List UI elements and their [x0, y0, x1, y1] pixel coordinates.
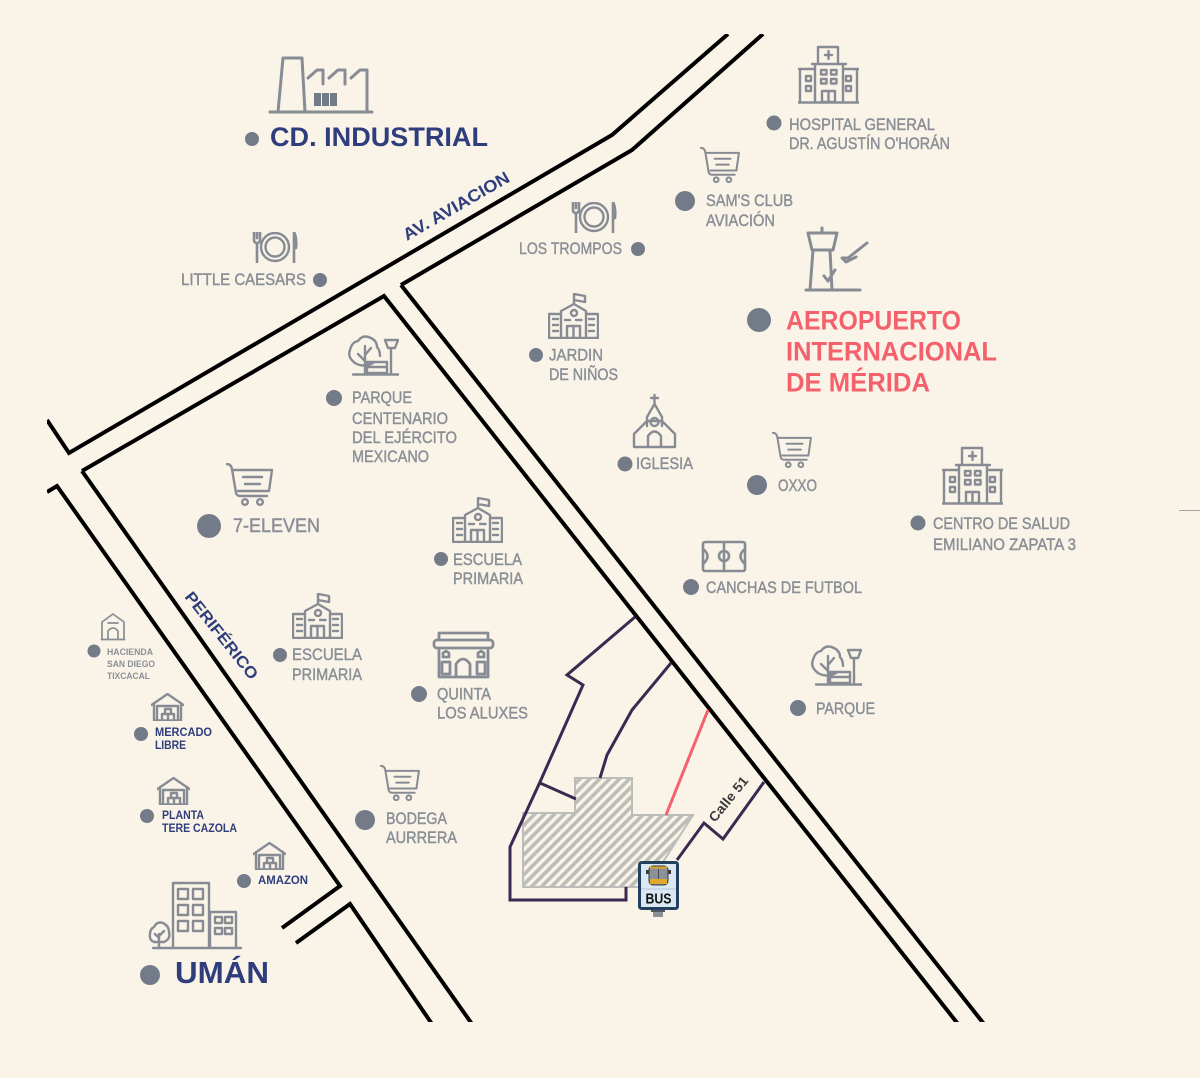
- location: Little Caesars: [181, 232, 327, 289]
- label: TERE CAZOLA: [162, 821, 237, 835]
- dot: [140, 965, 160, 985]
- icon: park: [812, 647, 862, 684]
- dot: [631, 242, 645, 256]
- location: Centro de Salud: [910, 448, 1076, 554]
- label: MERCADO: [155, 725, 212, 739]
- icon: cart: [227, 464, 272, 505]
- heading: CD. INDUSTRIAL: [270, 122, 488, 152]
- location: Umán: [140, 883, 269, 990]
- dot: [88, 644, 100, 658]
- dot: [529, 348, 543, 362]
- parcel spur: [540, 783, 576, 799]
- label: BODEGA: [386, 809, 448, 828]
- location: Escuela Primaria (north): [434, 498, 524, 588]
- label: DR. AGUSTÍN O'HORÁN: [789, 134, 950, 153]
- parcel inner curve: [600, 663, 671, 778]
- location: Amazon: [237, 843, 308, 888]
- location: Bodega Aurrera: [355, 766, 458, 847]
- icon: cart: [773, 433, 811, 467]
- icon: school: [453, 498, 502, 542]
- label: PARQUE: [816, 699, 875, 718]
- dot: [245, 132, 259, 146]
- icon: plate: [254, 232, 296, 263]
- label: PARQUE: [352, 388, 412, 407]
- icon: hospital: [798, 47, 859, 102]
- location: Cd. Industrial: [245, 58, 488, 152]
- icon: plate: [573, 202, 615, 233]
- location: Aeropuerto: [747, 228, 997, 398]
- label: LITTLE CAESARS: [181, 270, 306, 289]
- icon: control tower and plane: [806, 228, 867, 290]
- icon: cart: [381, 766, 419, 800]
- location: Planta Tere Cazola: [140, 778, 237, 835]
- dot: [747, 308, 771, 332]
- dot: [747, 475, 767, 495]
- heading: AEROPUERTO: [786, 306, 961, 336]
- label: TIXCACAL: [107, 671, 150, 682]
- label: LIBRE: [155, 738, 186, 752]
- dot: [326, 390, 342, 406]
- icon: warehouse: [152, 694, 184, 720]
- heading: UMÁN: [175, 955, 269, 990]
- heading: INTERNACIONAL: [786, 336, 997, 366]
- label: AMAZON: [258, 873, 308, 887]
- icon: hacienda: [102, 614, 124, 640]
- icon: city buildings: [150, 883, 241, 948]
- label: HACIENDA: [107, 647, 153, 658]
- red boundary line: [666, 710, 708, 815]
- label: CENTENARIO: [352, 409, 448, 428]
- label: PRIMARIA: [453, 569, 524, 588]
- location: Canchas de Futbol: [683, 542, 862, 597]
- location: Parque Centenario: [326, 337, 457, 466]
- icon: hospital: [942, 448, 1003, 504]
- dot: [618, 456, 632, 472]
- label: AURRERA: [386, 828, 458, 847]
- label: CANCHAS DE FUTBOL: [706, 578, 862, 597]
- label: LOS TROMPOS: [519, 239, 622, 258]
- location: Parque: [790, 647, 875, 718]
- icon: factory: [270, 58, 372, 112]
- dot: [434, 552, 448, 566]
- label: OXXO: [778, 476, 817, 495]
- label: ESCUELA: [453, 550, 523, 569]
- dot: [683, 579, 699, 595]
- label: PRIMARIA: [292, 665, 363, 684]
- dot: [766, 116, 782, 130]
- label: HOSPITAL GENERAL: [789, 115, 935, 134]
- parcel right edge: [677, 782, 764, 860]
- street label: Periférico: PERIFÉRICO: [181, 588, 262, 683]
- label: PLANTA: [162, 808, 204, 822]
- location: Quinta Los Aluxes: [411, 633, 528, 722]
- label: QUINTA: [437, 684, 492, 704]
- label: CENTRO DE SALUD: [933, 514, 1070, 533]
- label: DEL EJÉRCITO: [352, 428, 457, 447]
- location: Sam's Club: [675, 148, 793, 230]
- icon: arch building: [434, 633, 493, 677]
- location: Hacienda San Diego Tixcacal: [88, 614, 155, 682]
- dot: [140, 809, 154, 823]
- hatched building footprint: [523, 778, 693, 887]
- label: JARDIN: [549, 346, 603, 364]
- site plan: [510, 617, 764, 900]
- location: Escuela Primaria (south): [273, 594, 363, 684]
- dot: [411, 686, 427, 702]
- location: 7-Eleven: [197, 464, 320, 538]
- dot: [790, 700, 806, 716]
- icon: church: [634, 395, 675, 447]
- icon: warehouse: [254, 843, 286, 870]
- label: 7-ELEVEN: [233, 516, 320, 537]
- parcel outline: [510, 617, 635, 900]
- decorative tick: [1179, 510, 1200, 511]
- dot: [355, 810, 375, 830]
- location: Oxxo: [747, 433, 817, 495]
- icon: warehouse: [158, 778, 190, 804]
- dot: [910, 516, 926, 530]
- label: IGLESIA: [636, 454, 694, 473]
- location: Hospital General: [766, 47, 950, 153]
- icon: soccer field: [703, 542, 745, 571]
- label: EMILIANO ZAPATA 3: [933, 535, 1076, 554]
- label: ESCUELA: [292, 645, 363, 664]
- dot: [134, 727, 148, 741]
- location: Jardin de Niños: [529, 294, 618, 384]
- street label: Av. Aviacion: AV. AVIACION: [400, 168, 513, 244]
- heading: DE MÉRIDA: [786, 366, 930, 398]
- roads: [47, 34, 984, 1024]
- label: AVIACIÓN: [706, 211, 775, 230]
- label: DE NIÑOS: [549, 365, 618, 384]
- dot: [675, 191, 695, 211]
- label: MEXICANO: [352, 447, 429, 466]
- dot: [197, 514, 221, 538]
- icon: school: [549, 294, 598, 338]
- location: Mercado Libre: [134, 694, 212, 752]
- icon: cart: [701, 148, 739, 182]
- bus sign text: BUS: [646, 892, 672, 908]
- icon: bus stop sign: [640, 862, 678, 917]
- label: SAN DIEGO: [107, 659, 155, 670]
- location: Los Trompos: [519, 202, 645, 258]
- dot: [237, 874, 251, 888]
- icon: school: [293, 594, 342, 638]
- dot: [273, 648, 287, 662]
- label: LOS ALUXES: [437, 704, 528, 722]
- label: SAM'S CLUB: [706, 191, 793, 210]
- icon: park: [349, 337, 399, 374]
- dot: [313, 273, 327, 287]
- street label: Calle 51: Calle 51: [706, 773, 752, 825]
- location: Iglesia: [618, 395, 694, 473]
